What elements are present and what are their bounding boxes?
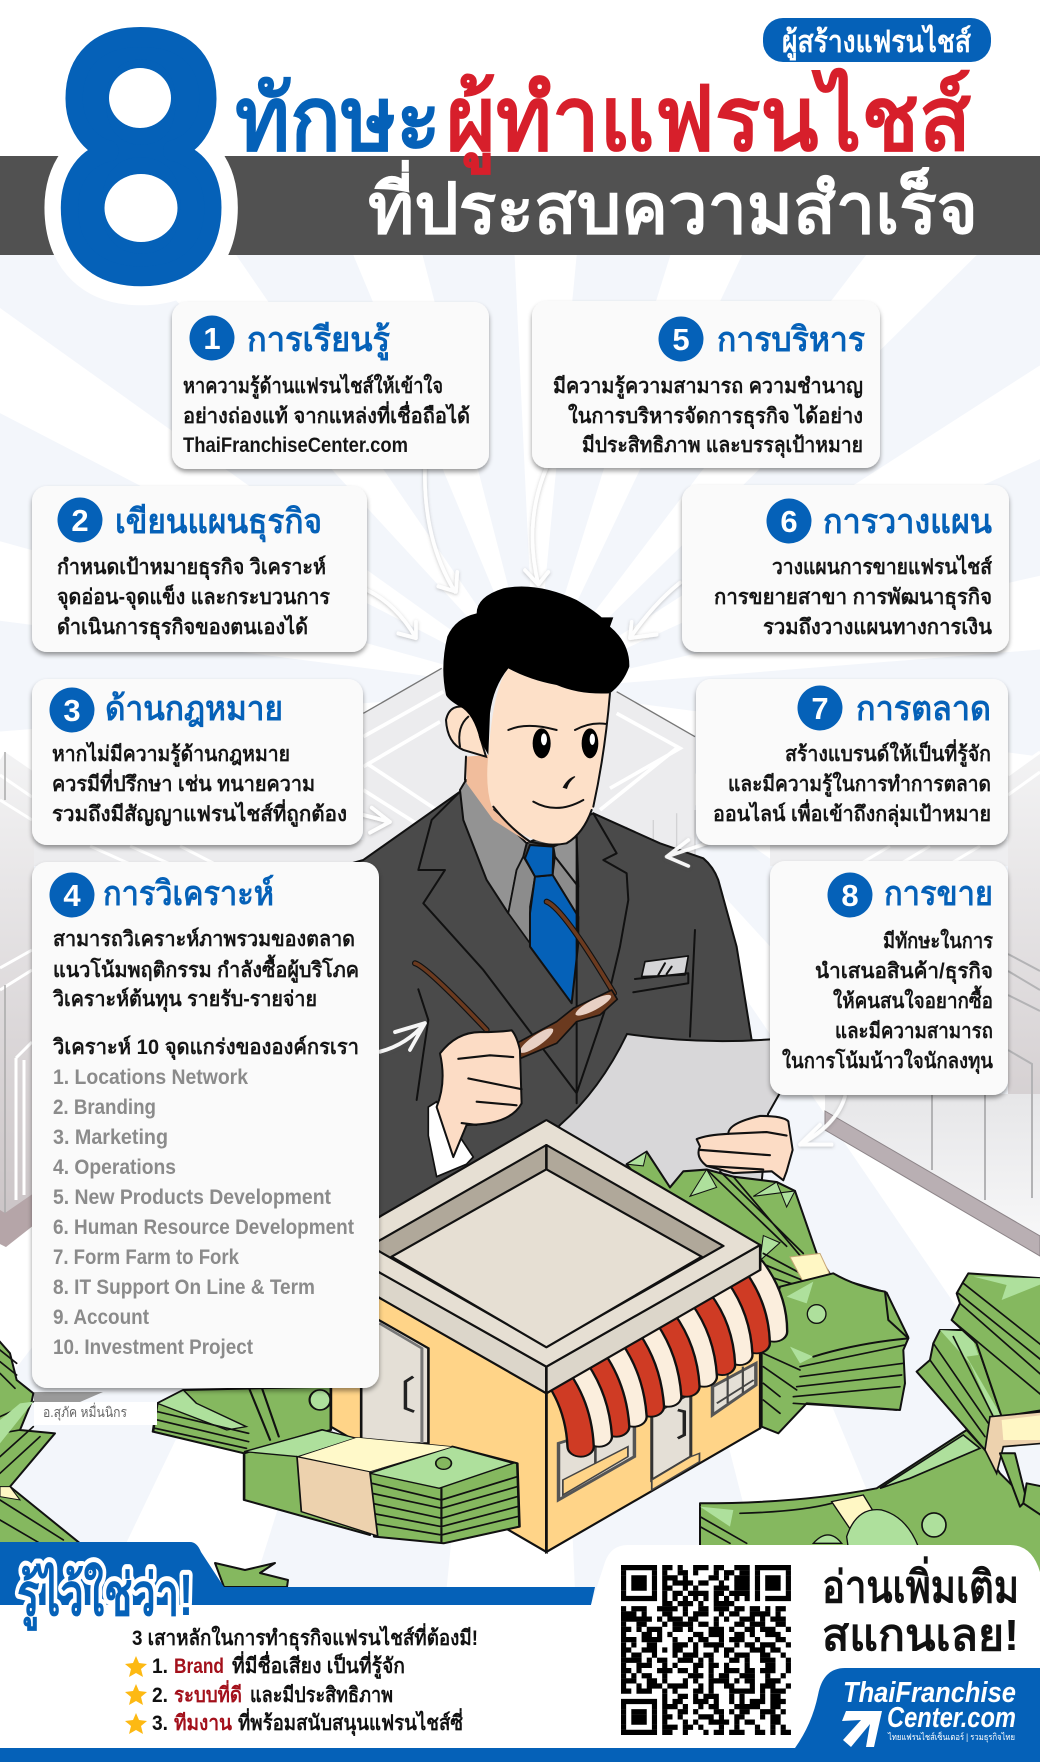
left hand with white cuff <box>428 1030 522 1177</box>
list of 10 strengths: 7. Form Farm to Fork <box>53 1246 239 1269</box>
neck <box>466 755 530 843</box>
heading: การบริหาร <box>717 321 866 359</box>
number badge 5: 5 <box>672 322 690 357</box>
publisher tag: ผู้สร้างแฟรนไชส์ <box>782 24 972 61</box>
roof front edges <box>331 1245 546 1393</box>
main title line 1: ผู้ทำแฟรนไชส์ <box>446 68 971 175</box>
left building wall <box>0 752 34 1247</box>
panel: skill 3 <box>32 679 363 845</box>
pillar 2: และมีประสิทธิภาพ <box>250 1683 393 1707</box>
pillar 2: ระบบที่ดี <box>174 1679 242 1707</box>
shop building <box>153 1120 774 1552</box>
body text: และมีความรู้ในการทำการตลาด <box>728 771 991 798</box>
arrow from card 3 <box>363 808 390 833</box>
body text: ให้คนสนใจอยากซื้อ <box>833 985 993 1013</box>
panel: skill 6 <box>682 485 1009 652</box>
front money stack <box>244 1430 370 1535</box>
side door <box>361 1310 428 1443</box>
arrows pointing to the man <box>363 467 845 1145</box>
strip between cards 3 and 4 <box>0 840 385 866</box>
number badge 3 <box>50 688 94 732</box>
ThaiFranchiseCenter logo: ไทยแฟรนไชส์เซ็นเตอร์ | รวมธุรกิจไทย <box>887 1730 1015 1743</box>
body text: ในการโน้มน้าวใจนักลงทุน <box>782 1048 994 1075</box>
hair <box>443 587 629 755</box>
title banner <box>0 0 1040 345</box>
arrow from card 2 <box>367 590 416 638</box>
arrow icon <box>842 1711 882 1747</box>
paper held by man <box>540 1034 790 1200</box>
main title line 2: ที่ประสบความสำเร็จ <box>368 159 978 248</box>
shirt <box>508 857 578 943</box>
money pile: left back bills <box>0 1340 288 1587</box>
credit text: อ.สุภัค หมื่นนิกร <box>43 1403 127 1421</box>
heading: การตลาด <box>856 690 991 728</box>
paper band on stack <box>297 1457 378 1536</box>
background sunburst rays <box>0 255 1040 1601</box>
body text <box>183 373 470 457</box>
number badge 4 <box>50 872 94 918</box>
body text <box>52 927 359 1013</box>
blue ribbon <box>0 1542 595 1605</box>
eyes <box>533 728 551 758</box>
shirt collar <box>460 780 527 913</box>
money stack behind front stack <box>153 1387 331 1453</box>
body text: แนวโน้มพฤติกรรม กำลังซื้อผู้บริโภค <box>53 954 359 984</box>
number badge 2 <box>58 498 102 542</box>
left fanned banknotes <box>0 1340 80 1543</box>
body text: ออนไลน์ เพื่อเข้าถึงกลุ่มเป้าหมาย <box>713 798 991 828</box>
heading: การวิเคราะห์ <box>103 874 274 913</box>
body text: สามารถวิเคราะห์ภาพรวมของตลาด <box>53 927 355 951</box>
left window <box>559 1420 634 1500</box>
list of 10 strengths: 4. Operations <box>53 1156 176 1179</box>
body text: อย่างถ่องแท้ จากแหล่งที่เชื่อถือได้ <box>183 400 470 428</box>
pillar 1 <box>125 1650 405 1680</box>
number badge 7 <box>798 686 842 730</box>
pillar 3: 3. <box>152 1712 168 1735</box>
heading: ด้านกฎหมาย <box>105 690 283 728</box>
right hand <box>697 1116 793 1180</box>
body text: สร้างแบรนด์ให้เป็นที่รู้จัก <box>785 738 991 768</box>
body text <box>57 555 331 641</box>
front door <box>652 1393 691 1480</box>
arrow from card 6 <box>630 583 680 638</box>
footer section <box>0 1542 1040 1762</box>
strip between cards 7 and 8 <box>770 840 1040 866</box>
body text: ในการบริหารจัดการธุรกิจ ได้อย่าง <box>568 403 863 430</box>
pillar 3 <box>125 1707 463 1737</box>
ear <box>446 707 486 757</box>
body text: มีทักษะในการ <box>883 928 994 953</box>
body text: ดำเนินการธุรกิจของตนเองได้ <box>57 614 308 641</box>
scan call to action: สแกนเลย! <box>822 1611 1019 1660</box>
list of 10 strengths <box>53 1066 354 1359</box>
pillar 2: 2. <box>152 1684 168 1707</box>
big banknote stacks at the right <box>700 1273 1040 1573</box>
heading: เขียนแผนธุรกิจ <box>115 503 322 543</box>
body text: ควรมีที่ปรึกษา เช่น ทนายความ <box>52 768 315 796</box>
heading: การวางแผน <box>823 503 992 541</box>
nose <box>563 777 575 788</box>
suit jacket <box>340 587 773 1230</box>
right building wall <box>1008 752 1040 1245</box>
ThaiFranchiseCenter logo: ThaiFranchise <box>843 1677 1016 1709</box>
body text: วางแผนการขายแฟรนไชส์ <box>772 554 992 579</box>
three pillars text: 3 เสาหลักในการทำธุรกิจแฟรนไชส์ที่ต้องมี! <box>132 1622 478 1652</box>
lapels and seams <box>417 792 695 1103</box>
list of 10 strengths: 1. Locations Network <box>53 1066 248 1089</box>
pillar 3: ทีมงาน <box>174 1711 233 1735</box>
body text: หากไม่มีความรู้ด้านกฎหมาย <box>52 741 290 768</box>
blue bottom bar <box>0 1748 1040 1762</box>
body text <box>714 554 993 639</box>
white footer ground <box>0 1605 600 1748</box>
number badge 6 <box>766 498 812 544</box>
list of 10 strengths: 2. Branding <box>53 1096 156 1119</box>
body text: กำหนดเป้าหมายธุรกิจ วิเคราะห์ <box>57 555 326 581</box>
list of 10 strengths: 8. IT Support On Line & Term <box>53 1276 315 1299</box>
body text <box>782 928 994 1075</box>
man illustration <box>340 587 790 1230</box>
number badge 7: 7 <box>811 691 829 726</box>
number badge 3: 3 <box>63 693 81 728</box>
panel: skill 1 <box>172 302 489 469</box>
number badge 4: 4 <box>63 878 81 913</box>
three pillars text <box>125 1622 478 1737</box>
body text: การขยายสาขา การพัฒนาธุรกิจ <box>714 586 992 611</box>
list of 10 strengths: 6. Human Resource Development <box>53 1216 354 1239</box>
pillar 3: ที่พร้อมสนับสนุนแฟรนไชส์ซี่ <box>238 1707 463 1737</box>
list of 10 strengths: 10. Investment Project <box>53 1336 253 1359</box>
arrow from card 4 <box>380 1023 425 1052</box>
dark band <box>0 156 1040 255</box>
panel: QR and read more <box>591 1545 1040 1748</box>
banknote peeking over blue tab <box>215 1563 288 1587</box>
pillar 2 <box>125 1679 393 1707</box>
arrow from card 8 <box>800 1096 845 1145</box>
body text: รวมถึงวางแผนทางการเงิน <box>763 616 993 639</box>
panel: skill 4 <box>32 862 379 1388</box>
body text: รวมถึงมีสัญญาแฟรนไชส์ที่ถูกต้อง <box>52 798 347 828</box>
panel: skill 5 <box>532 301 880 468</box>
eyebrows, jaw and mouth <box>465 693 610 845</box>
arrow from card 5 <box>525 467 548 585</box>
shop walls <box>331 1270 546 1552</box>
pillar 1: ที่มีชื่อเสียง เป็นที่รู้จัก <box>232 1650 405 1680</box>
eyeglasses <box>415 902 617 1060</box>
necktie <box>530 875 578 1003</box>
body text: วิเคราะห์ต้นทุน รายรับ-รายจ่าย <box>52 987 317 1013</box>
arrow from card 7 <box>667 840 707 866</box>
body text <box>713 738 991 828</box>
body text: มีประสิทธิภาพ และบรรลุเป้าหมาย <box>582 433 863 459</box>
body text: มีความรู้ความสามารถ ความชำนาญ <box>553 374 863 400</box>
list of 10 strengths: 3. Marketing <box>53 1126 168 1149</box>
QR code <box>621 1568 791 1732</box>
pocket square <box>642 956 688 977</box>
panel: skill 8 <box>770 861 1008 1095</box>
body text: หาความรู้ด้านแฟรนไชส์ให้เข้าใจ <box>183 373 443 400</box>
upper bills <box>627 1152 908 1350</box>
body text: นำเสนอสินค้า/ธุรกิจ <box>815 959 993 985</box>
lower right of the pile <box>762 1273 908 1433</box>
pillar 1: Brand <box>174 1655 224 1678</box>
body text <box>553 374 863 459</box>
heading: การเรียนรู้ <box>247 321 391 361</box>
panel: skill 2 <box>32 486 367 652</box>
background isometric buildings <box>0 668 1040 1402</box>
main title line 1: ทักษะ <box>235 70 441 170</box>
number badge 1: 1 <box>203 321 221 356</box>
did you know heading: รู้ไว้ใช่ว่า! <box>17 1561 193 1631</box>
number badge 5 <box>658 316 704 362</box>
number badge 1 <box>190 316 234 360</box>
body text: และมีความสามารถ <box>835 1019 993 1043</box>
arrow from card 1 <box>425 468 457 592</box>
list of 10 strengths: 9. Account <box>53 1306 149 1329</box>
right window <box>712 1363 756 1415</box>
main title line 1 <box>235 68 971 175</box>
paper band <box>790 1253 830 1282</box>
striped awning <box>559 1267 774 1447</box>
ground shadow behind credit <box>34 1392 103 1402</box>
body text <box>52 741 347 828</box>
pillar 1: 1. <box>152 1655 168 1678</box>
heading: การขาย <box>884 875 993 913</box>
roof top <box>331 1120 760 1367</box>
number badge 8: 8 <box>841 878 859 913</box>
building behind the man <box>363 668 695 867</box>
body text: ThaiFranchiseCenter.com <box>183 434 408 457</box>
scan call to action <box>822 1556 1019 1660</box>
ThaiFranchiseCenter logo <box>795 1668 1040 1748</box>
number badge 6: 6 <box>780 504 798 539</box>
body text: จุดอ่อน-จุดแข็ง และกระบวนการ <box>57 583 331 611</box>
sub heading: วิเคราะห์ 10 จุดแกร่งขององค์กรเรา <box>52 1035 359 1061</box>
publisher tag <box>763 18 991 62</box>
face <box>487 668 610 845</box>
panel: skill 7 <box>696 679 1008 845</box>
money pile behind shop <box>627 1116 908 1433</box>
credit text <box>34 1402 157 1425</box>
number badge 2: 2 <box>71 503 89 538</box>
list of 10 strengths: 5. New Products Development <box>53 1186 331 1209</box>
number badge 8 <box>828 872 872 918</box>
